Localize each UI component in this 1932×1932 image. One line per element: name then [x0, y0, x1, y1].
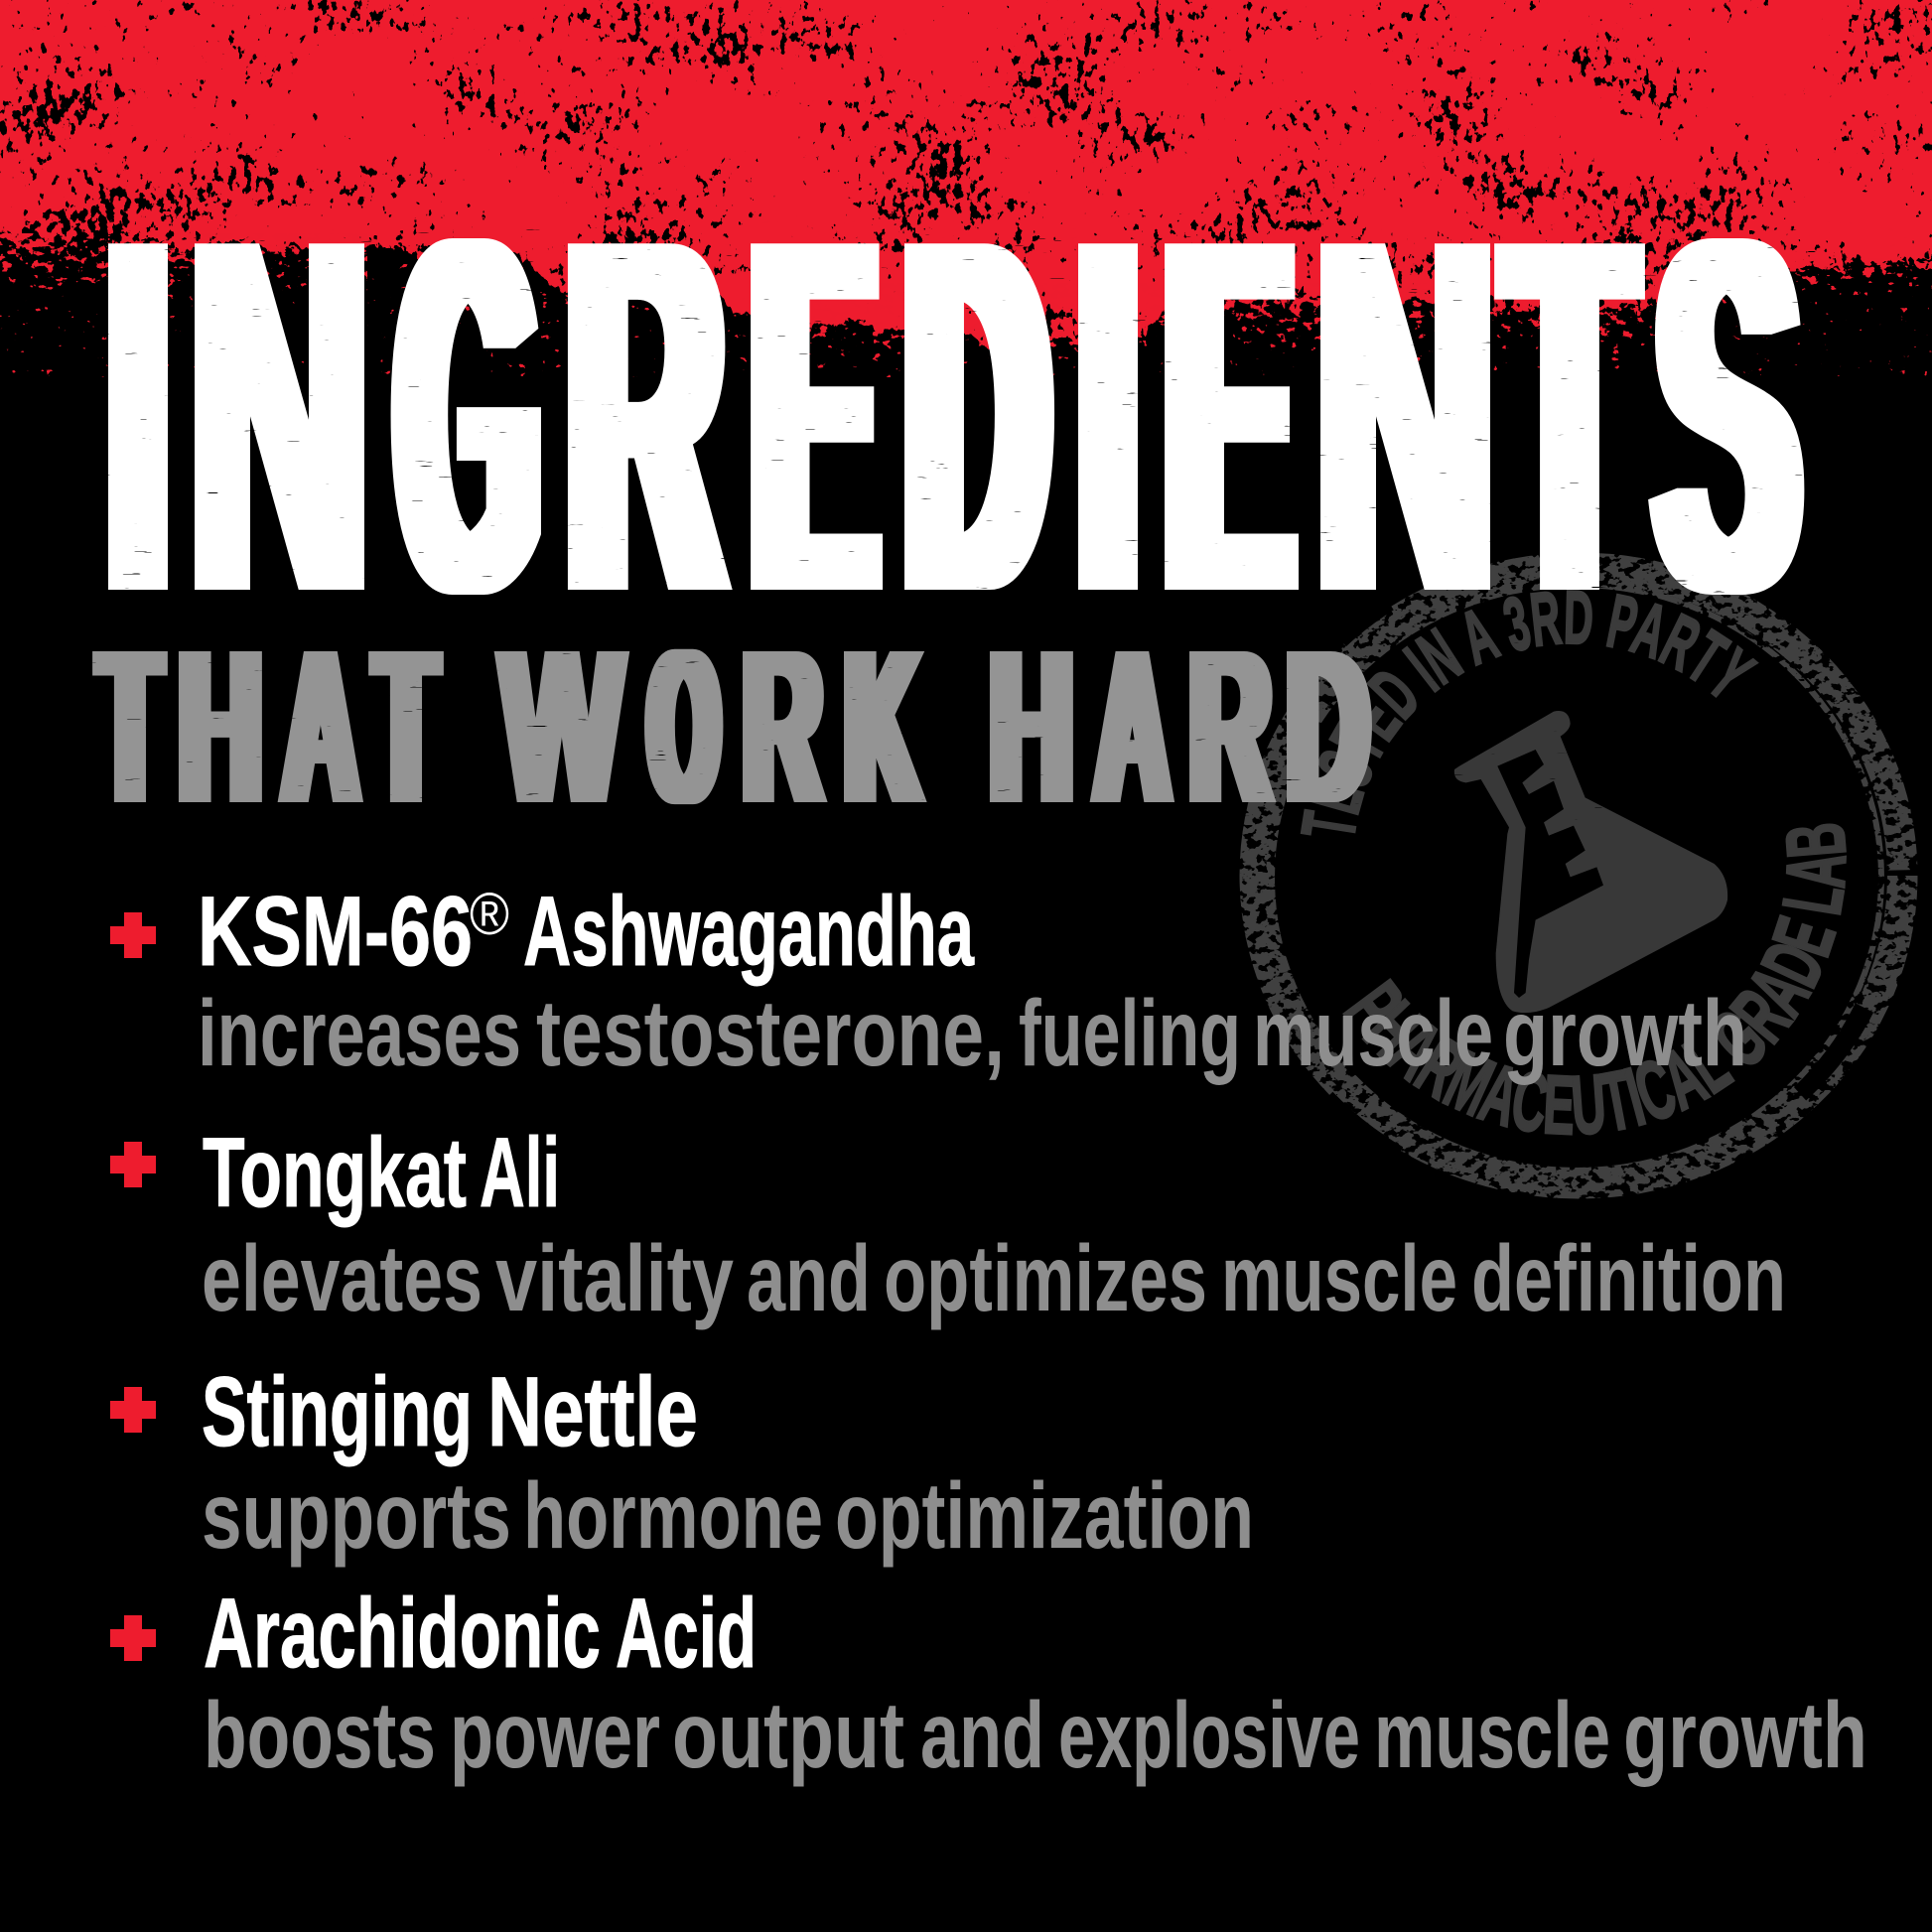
ingredient name: Ashwagandha — [523, 876, 975, 986]
ingredient name: Tongkat — [203, 1117, 467, 1227]
ingredient name: Arachidonic — [204, 1578, 601, 1688]
subtitle: THAT WORK HARD: W — [500, 605, 622, 850]
ingredient benefit: boosts — [204, 1683, 436, 1788]
ingredient benefit: fueling — [1019, 981, 1241, 1086]
ingredient name: Nettle — [487, 1356, 698, 1466]
subtitle: THAT WORK HARD: T — [100, 605, 160, 850]
subtitle: THAT WORK HARD: T — [376, 605, 436, 850]
item: KSM-66 Ashwagandha — [110, 876, 1747, 1086]
ingredient benefit — [202, 1463, 1254, 1569]
ingredient benefit: hormone — [523, 1463, 823, 1569]
subtitle: THAT WORK HARD: O — [649, 604, 718, 849]
title: INGREDIENTS: D — [907, 135, 1046, 697]
title: INGREDIENTS: N — [1315, 134, 1495, 697]
title: INGREDIENTS: G — [399, 135, 536, 697]
subtitle: THAT WORK HARD: A — [283, 603, 358, 849]
subtitle: THAT WORK HARD: D — [1287, 605, 1369, 850]
title: INGREDIENTS: R — [569, 136, 722, 697]
ingredient benefit — [202, 1226, 1786, 1331]
title: INGREDIENTS: T — [1507, 135, 1632, 698]
item: Tongkat Ali — [110, 1117, 1786, 1331]
stamp: tested in a 3rd party lab — [1239, 553, 1918, 1199]
icon: red plus — [110, 1142, 156, 1187]
red grunge brush band — [0, 0, 1932, 362]
stamp text top: TESTED IN A 3RD PARTY — [1301, 590, 1759, 836]
ingredient benefit: definition — [1471, 1226, 1786, 1331]
subtitle: THAT WORK HARD: H — [179, 605, 262, 850]
ingredient benefit: growth — [1623, 1683, 1867, 1788]
icon: red plus — [110, 1615, 156, 1661]
subtitle: THAT WORK HARD: K — [846, 605, 919, 850]
icon: lab flask — [1454, 711, 1727, 1013]
ingredient benefit — [198, 981, 1747, 1086]
stamp ring — [1245, 558, 1912, 1193]
ingredient list — [110, 876, 1867, 1788]
ingredient benefit: optimization — [835, 1463, 1254, 1569]
ingredient name: ® — [470, 881, 509, 947]
title: INGREDIENTS: E — [756, 135, 873, 697]
ingredient name: KSM-66 — [198, 876, 473, 986]
ingredient benefit: explosive — [1058, 1683, 1360, 1788]
ingredient benefit: output — [672, 1683, 904, 1788]
ingredient benefit: muscle — [1221, 1226, 1457, 1331]
stamp text bottom: PHARMACEUTICAL GRADE LAB — [1342, 824, 1847, 1136]
ingredient benefit: growth — [1503, 981, 1747, 1086]
ingredient benefit: supports — [202, 1463, 511, 1569]
ingredient benefit: and — [747, 1226, 871, 1331]
ingredient benefit: muscle — [1374, 1683, 1610, 1788]
title: INGREDIENTS — [103, 134, 1798, 698]
ingredient benefit: muscle — [1253, 981, 1493, 1086]
subtitle: THAT WORK HARD: H — [990, 605, 1073, 850]
ingredient benefit: elevates — [202, 1226, 483, 1331]
subtitle: THAT WORK HARD: A — [1095, 604, 1170, 849]
ingredient name: Stinging — [202, 1356, 473, 1466]
subtitle: THAT WORK HARD: R — [744, 604, 822, 849]
ingredient benefit: and — [920, 1683, 1044, 1788]
ingredient name: Acid — [616, 1578, 757, 1688]
title: INGREDIENTS: I — [103, 134, 173, 697]
ingredient benefit: optimizes — [884, 1226, 1207, 1331]
ingredient benefit: power — [450, 1683, 660, 1788]
title: INGREDIENTS: E — [1170, 135, 1289, 697]
title: INGREDIENTS: N — [190, 134, 369, 697]
title: INGREDIENTS: I — [1073, 134, 1143, 697]
item: Arachidonic Acid — [110, 1578, 1867, 1788]
distress scratches over headings — [79, 228, 1827, 824]
ingredient benefit: vitality — [495, 1226, 734, 1331]
subtitle: THAT WORK HARD: R — [1189, 605, 1271, 850]
icon: red plus — [110, 1387, 156, 1433]
subtitle: THAT WORK HARD — [100, 603, 1369, 850]
ingredient benefit — [204, 1683, 1867, 1788]
ingredient benefit: testosterone, — [536, 981, 1005, 1086]
icon: red plus — [110, 912, 156, 958]
ingredient benefit: increases — [198, 981, 521, 1086]
item: Stinging Nettle — [110, 1356, 1254, 1569]
title: INGREDIENTS: S — [1657, 135, 1798, 697]
ingredient name: Ali — [480, 1117, 560, 1227]
ingredient name — [198, 876, 975, 986]
